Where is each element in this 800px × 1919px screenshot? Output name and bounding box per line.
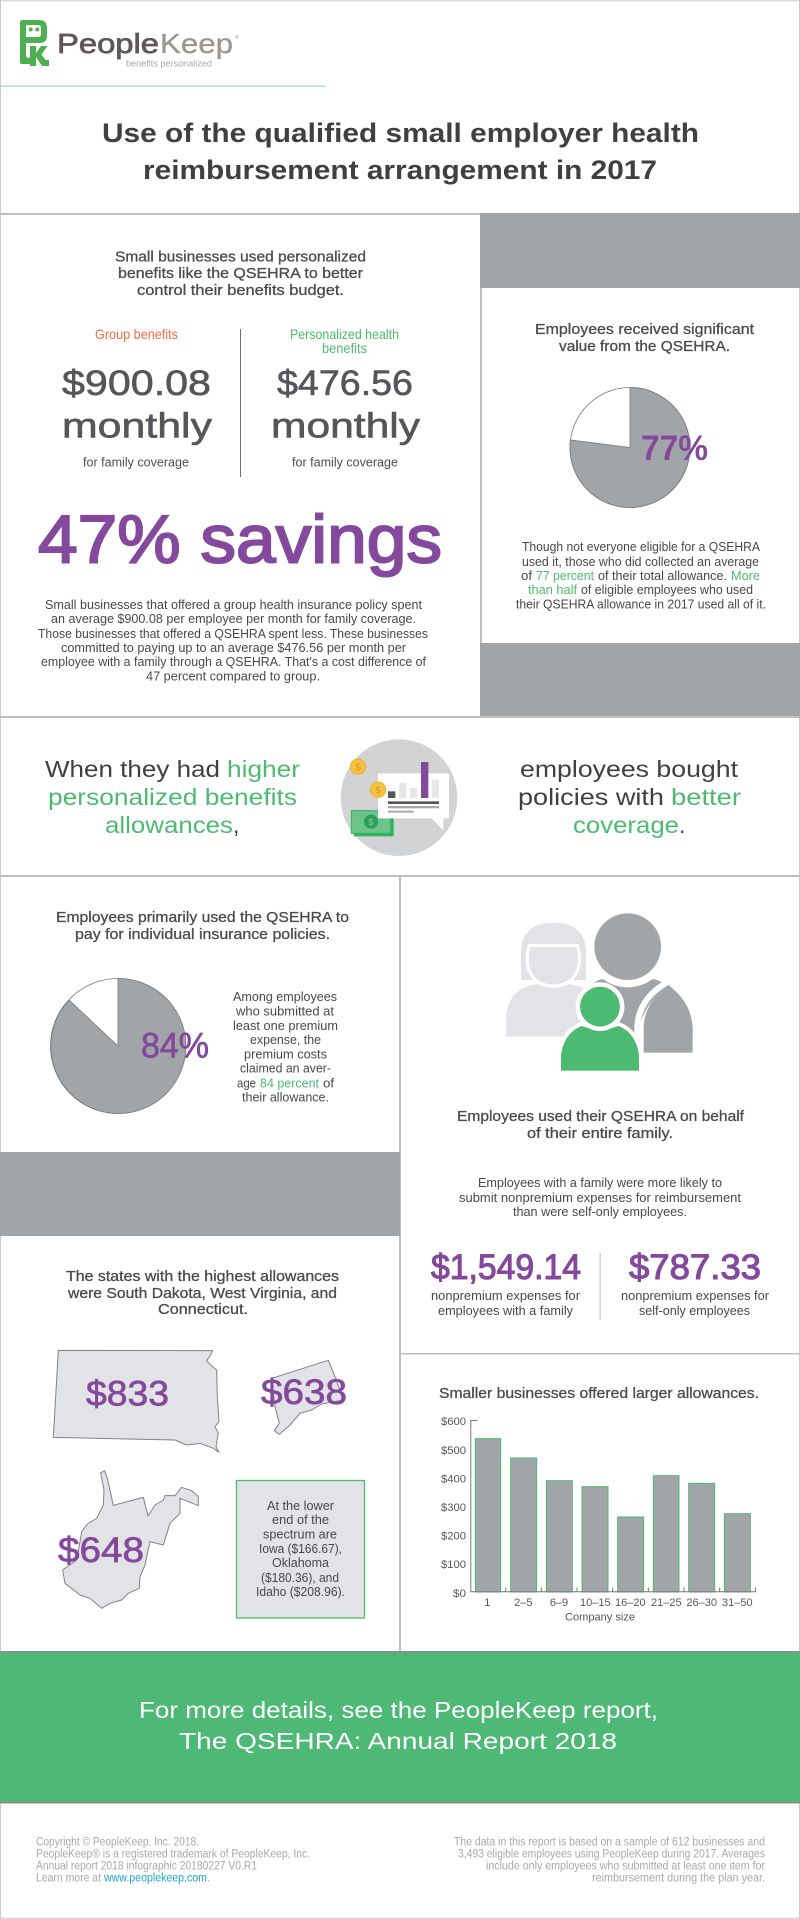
footer: methodology note: 3,493 eligible employees using PeopleKeep during 2017. Averages <box>458 1848 765 1860</box>
x axis labels <box>484 1597 753 1609</box>
panel heading: budget control <box>115 248 366 299</box>
text block: nonpremium expenses: than were self-only employees. <box>513 1204 687 1219</box>
x axis labels: 6–9 <box>550 1597 568 1609</box>
text block: allowance use: of their total allowance. <box>598 568 727 583</box>
footer: copyright: Copyright © PeopleKeep, Inc. 2018. <box>36 1836 199 1848</box>
text block: premium share: least one premium <box>233 1018 338 1033</box>
text block: cost explanation: committed to paying up to an average $476.56 per month per <box>61 640 407 655</box>
call to action banner: For more details, see the PeopleKeep report, <box>139 1697 658 1723</box>
stat: self-only expenses: $787.33 <box>629 1248 761 1287</box>
column: personalized benefits cost: for family coverage <box>292 454 398 470</box>
y axis labels <box>441 1416 466 1600</box>
callout right: better coverage: . <box>679 812 685 838</box>
logo tagline: benefits personalized <box>126 58 212 70</box>
footer: methodology note <box>454 1836 765 1884</box>
text block: premium share: age <box>237 1076 256 1090</box>
text block: cost explanation: Those businesses that offered a QSEHRA spent less. These businesses <box>38 626 428 641</box>
text block: allowance use: More <box>731 568 760 583</box>
callout right: better coverage <box>518 756 741 838</box>
callout left: higher allowances: , <box>233 812 239 838</box>
footer: copyright <box>36 1836 310 1884</box>
icon: money and report chart <box>341 739 457 856</box>
footer: copyright: PeopleKeep® is a registered trademark of PeopleKeep, Inc. <box>36 1848 310 1860</box>
callout left: higher allowances: personalized benefits <box>48 784 297 810</box>
panel heading: budget control: Small businesses used personalized <box>115 248 366 266</box>
y axis labels: $300 <box>441 1502 466 1514</box>
pie chart: 84% <box>50 978 209 1114</box>
x axis labels: 2–5 <box>514 1597 532 1609</box>
title: reimbursement arrangement in 2017 <box>143 155 657 185</box>
grey band: left column <box>0 1152 400 1236</box>
title <box>102 118 699 185</box>
map: South Dakota: $833 <box>86 1374 169 1414</box>
callout right: better coverage: employees bought <box>520 756 739 782</box>
grey band top <box>480 213 800 288</box>
stat: self-only expenses <box>621 1248 770 1318</box>
panel: individual insurance premiums <box>50 909 349 1114</box>
map: West Virginia <box>58 1471 198 1608</box>
text block: premium share: premium costs <box>244 1046 327 1062</box>
pie chart: 84%: 84% <box>141 1026 209 1066</box>
callout right: better coverage: policies with <box>518 784 664 810</box>
panel: company size allowances <box>439 1385 759 1624</box>
map: South Dakota <box>53 1350 219 1452</box>
column: personalized benefits cost: benefits <box>322 340 367 356</box>
text block: allowance use: of <box>521 568 532 583</box>
panel heading: states: were South Dakota, West Virginia, and <box>67 1285 337 1302</box>
footer: methodology note: reimbursement during the plan year. <box>592 1872 765 1884</box>
panel heading: company size: Smaller businesses offered larger allowances. <box>439 1385 759 1402</box>
x axis labels: 10–15 <box>580 1597 611 1609</box>
footer: methodology note: include only employees who submitted at least one item for <box>486 1860 765 1872</box>
x axis labels: 1 <box>484 1597 490 1609</box>
callout box: lowest allowances: ($180.36), and <box>261 1570 339 1585</box>
x axis labels: 31–50 <box>722 1597 753 1609</box>
headline stat: 47% savings: 47% savings <box>38 502 442 578</box>
text block: premium share <box>233 989 338 1104</box>
call to action banner <box>0 1651 800 1804</box>
header logo: PeopleKeep <box>20 20 239 70</box>
callout left: higher allowances <box>45 756 300 838</box>
grey band bottom <box>480 643 800 718</box>
text block: premium share: claimed an aver- <box>240 1060 331 1076</box>
callout box: lowest allowances: Oklahoma <box>272 1555 330 1570</box>
text block: allowance use: their QSEHRA allowance in 2017 used all of it. <box>516 596 766 612</box>
y axis labels: $400 <box>441 1474 466 1486</box>
column: personalized benefits cost: Personalized health <box>290 326 399 342</box>
icon: PK logo mark <box>20 20 49 66</box>
stat: self-only expenses: self-only employees <box>639 1303 750 1318</box>
text block: premium share: their allowance. <box>242 1090 329 1104</box>
panel heading: family: Employees used their QSEHRA on behalf <box>457 1108 745 1125</box>
column: group benefits cost: monthly <box>62 406 213 446</box>
bar chart: allowance by company size <box>441 1416 756 1624</box>
panel heading: employee value <box>535 321 755 355</box>
panel heading: states: The states with the highest allowances <box>66 1268 339 1285</box>
callout box: lowest allowances: end of the <box>272 1512 329 1527</box>
text block: cost explanation: Small businesses that offered a group health insurance policy spent <box>45 597 422 612</box>
panel heading: states: Connecticut. <box>158 1301 248 1318</box>
text block: nonpremium expenses: submit nonpremium expenses for reimbursement <box>459 1190 741 1205</box>
callout box: lowest allowances <box>236 1480 364 1618</box>
y axis labels: $500 <box>441 1445 466 1457</box>
footer: copyright: www.peoplekeep.com <box>103 1872 207 1884</box>
text block: cost explanation: employee with a family through a QSEHRA. That's a cost difference of <box>41 654 426 669</box>
icon: money and report chart: $ <box>375 785 381 796</box>
column: personalized benefits cost: monthly <box>271 406 421 446</box>
callout left: higher allowances: When they had <box>45 756 220 782</box>
panel heading: premiums: pay for individual insurance policies. <box>75 926 330 943</box>
text block: cost explanation: 47 percent compared to group. <box>146 668 320 684</box>
callout right: better coverage: coverage <box>573 812 679 838</box>
text block: premium share: 84 percent <box>260 1076 319 1090</box>
panel heading: employee value: value from the QSEHRA. <box>559 338 730 355</box>
pie chart: 77% <box>570 388 708 508</box>
panel: highest allowance states <box>53 1268 365 1618</box>
panel heading: budget control: control their benefits budget. <box>137 282 344 299</box>
footer: copyright: Learn more at <box>36 1872 102 1884</box>
icon: money and report chart: $ <box>355 762 361 773</box>
y axis labels: $0 <box>453 1588 466 1600</box>
callout box: lowest allowances: spectrum are <box>263 1526 337 1542</box>
title: Use of the qualified small employer health <box>102 118 699 148</box>
logo wordmark: People <box>57 28 159 59</box>
panel: family use <box>431 906 770 1320</box>
column: group benefits cost: $900.08 <box>62 364 211 403</box>
x axis labels: 21–25 <box>651 1597 682 1609</box>
footer: methodology note: The data in this report is based on a sample of 612 businesses and <box>454 1836 765 1848</box>
y axis labels: $200 <box>441 1530 466 1542</box>
text block: cost explanation <box>38 597 428 684</box>
column: group benefits cost: Group benefits <box>95 326 178 342</box>
pie chart: 77%: 77% <box>641 429 708 468</box>
x axis labels: 26–30 <box>686 1597 717 1609</box>
text block: cost explanation: an average $900.08 per employee per month for family coverage. <box>51 611 416 626</box>
panel heading: family <box>457 1108 745 1142</box>
stat: family expenses: $1,549.14 <box>431 1248 581 1287</box>
callout right: better coverage: better <box>671 784 741 810</box>
text block: premium share: who submitted at <box>235 1004 334 1018</box>
y axis labels: $100 <box>441 1559 466 1571</box>
stat: family expenses: nonpremium expenses for <box>431 1288 581 1303</box>
bars <box>475 1439 750 1592</box>
column: group benefits cost: for family coverage <box>83 454 189 470</box>
text block: nonpremium expenses: Employees with a family were more likely to <box>478 1175 722 1190</box>
text block: premium share: Among employees <box>233 989 337 1004</box>
callout left: higher allowances: higher <box>227 756 300 782</box>
column: personalized benefits cost: $476.56 <box>277 364 413 403</box>
stat: family expenses: employees with a family <box>438 1303 573 1318</box>
panel: employee value <box>480 213 800 718</box>
text block: allowance use: of eligible employees who used <box>581 582 753 597</box>
text block: nonpremium expenses <box>459 1175 741 1219</box>
panel: allowances and coverage banner <box>45 739 741 856</box>
column: group benefits cost <box>62 326 213 470</box>
icon: family of three <box>506 906 693 1075</box>
text block: premium share: expense, the <box>250 1032 321 1047</box>
x axis labels: 16–20 <box>615 1597 646 1609</box>
text block: allowance use: than half <box>528 582 577 597</box>
callout box: lowest allowances: Iowa ($166.67), <box>259 1541 342 1556</box>
panel heading: premiums <box>56 909 349 943</box>
call to action banner: The QSEHRA: Annual Report 2018 <box>179 1728 617 1754</box>
text block: premium share: of <box>323 1076 334 1090</box>
callout box: lowest allowances: At the lower <box>267 1498 335 1513</box>
text block: allowance use: 77 percent <box>536 568 594 583</box>
text block: allowance use: used it, those who did collected an average <box>522 554 759 569</box>
column: personalized benefits cost <box>271 326 421 470</box>
panel heading: employee value: Employees received significant <box>535 321 755 338</box>
header logo: PeopleKeep: ® <box>235 34 239 41</box>
map: Connecticut: $638 <box>261 1373 347 1412</box>
stat: self-only expenses: nonpremium expenses for <box>621 1288 770 1303</box>
panel: budget savings <box>38 248 442 684</box>
y axis labels: $600 <box>441 1416 466 1428</box>
stat: family expenses <box>431 1248 581 1318</box>
panel heading: family: of their entire family. <box>527 1125 673 1142</box>
footer: copyright: . <box>207 1872 210 1884</box>
footer: copyright: Annual report 2018 infographic 20180227 V0.R1 <box>36 1860 257 1872</box>
panel heading: premiums: Employees primarily used the QSEHRA to <box>56 909 349 926</box>
text block: allowance use <box>516 539 766 612</box>
panel heading: budget control: benefits like the QSEHRA to better <box>118 265 363 282</box>
icon: money and report chart: $ <box>368 817 374 828</box>
callout box: lowest allowances: Idaho ($208.96). <box>256 1584 345 1599</box>
text block: allowance use: Though not everyone eligible for a QSEHRA <box>522 539 760 554</box>
panel heading: states <box>66 1268 339 1318</box>
x axis title: Company size <box>565 1612 635 1624</box>
map: Connecticut <box>261 1360 347 1434</box>
map: West Virginia: $648 <box>58 1531 144 1570</box>
axes <box>471 1420 756 1592</box>
header logo: PeopleKeep: Keep <box>160 28 233 59</box>
callout left: higher allowances: allowances <box>105 812 233 838</box>
